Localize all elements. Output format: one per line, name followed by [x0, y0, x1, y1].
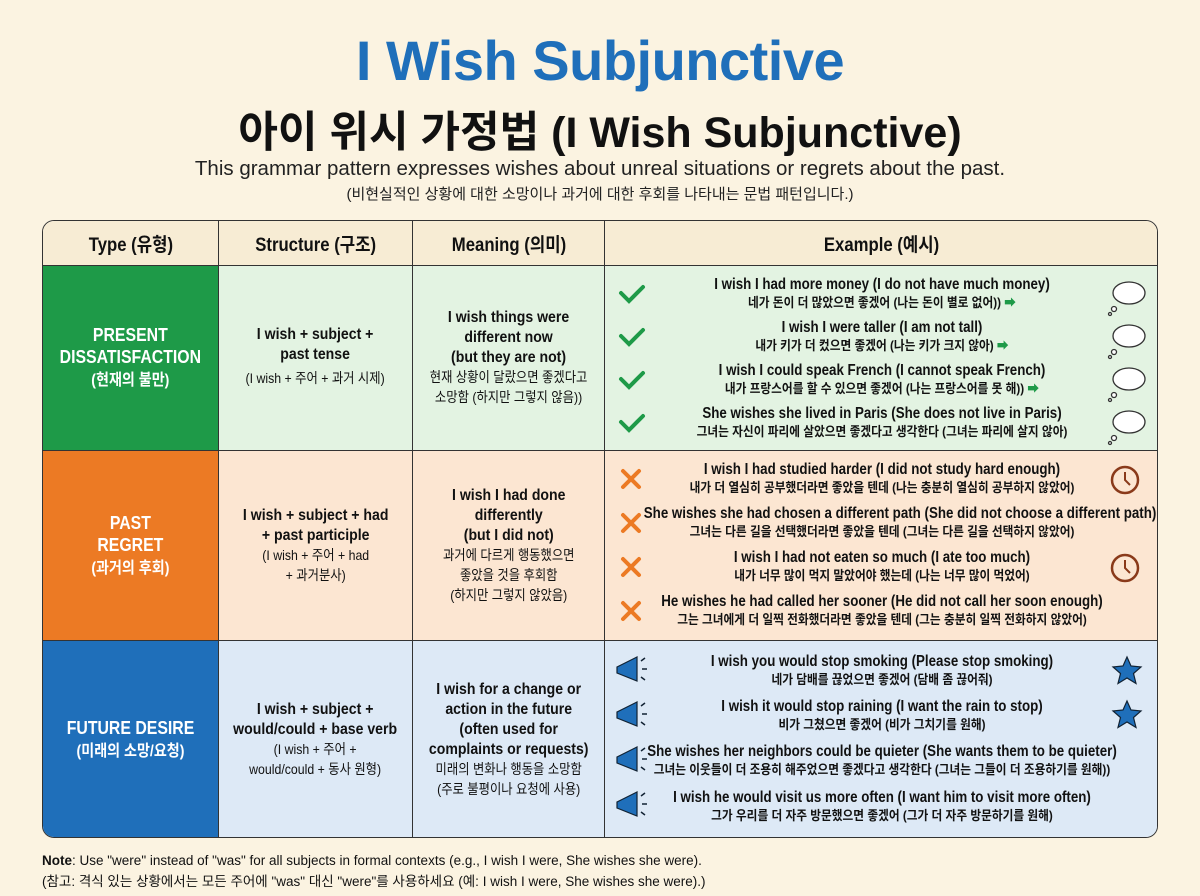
examples present	[605, 266, 1159, 451]
type label past: (과거의 후회)	[91, 560, 170, 576]
examples future: I wish it would stop raining (I want the rain to stop)	[721, 698, 1043, 715]
examples future: 네가 담배를 끊었으면 좋겠어 (담배 좀 끊어줘)	[771, 672, 993, 687]
structure future: I wish + subject +	[257, 701, 374, 718]
meaning present: 소망함 (하지만 그렇지 않음))	[435, 389, 582, 405]
structure future	[219, 641, 413, 839]
table	[42, 220, 1158, 838]
row: past regret	[43, 451, 1157, 641]
structure past: + 과거분사)	[285, 566, 346, 582]
examples past: 그녀는 다른 길을 선택했더라면 좋았을 텐데 (그녀는 다른 길을 선택하지 않았어)	[690, 524, 1074, 539]
examples present: 내가 프랑스어를 할 수 있으면 좋겠어 (나는 프랑스어를 못 해)) ➡	[725, 381, 1039, 396]
meaning present: (but they are not)	[451, 349, 566, 366]
examples past: He wishes he had called her sooner (He did not call her soon enough)	[661, 593, 1103, 610]
header row: Meaning (의미)	[451, 234, 566, 256]
icons: checkmarks	[618, 284, 646, 433]
type label present: DISSATISFACTION	[60, 347, 201, 367]
icons: stars	[1112, 656, 1142, 729]
meaning present: 현재 상황이 달랐으면 좋겠다고	[430, 369, 587, 385]
structure present: I wish + subject +	[257, 326, 374, 343]
type label present	[43, 266, 219, 451]
footer note: (참고: 격식 있는 상황에서는 모든 주어에 "was" 대신 "were"를 사용하세요 (예: I wish I were, She wishes she were).)	[42, 874, 706, 889]
meaning past: I wish I had done	[452, 486, 565, 504]
title: I Wish Subjunctive	[356, 29, 844, 92]
footer note	[42, 853, 706, 889]
type label present: PRESENT	[93, 325, 168, 345]
examples future: 그가 우리를 더 자주 방문했으면 좋겠어 (그가 더 자주 방문하기를 원해)	[711, 808, 1053, 823]
examples present: I wish I could speak French (I cannot speak French)	[719, 362, 1045, 379]
row: present dissatisfaction	[43, 266, 1157, 451]
type label present: (현재의 불만)	[91, 372, 170, 389]
structure past	[219, 451, 413, 641]
examples past: 내가 더 열심히 공부했더라면 좋았을 텐데 (나는 충분히 열심히 공부하지 않았어)	[690, 480, 1074, 495]
footer note: Note: Use "were" instead of "was" for all subjects in formal contexts (e.g., I wish I were, She wishes she were).	[42, 853, 702, 868]
examples past: I wish I had studied harder (I did not study hard enough)	[704, 461, 1060, 478]
structure future: would/could + base verb	[234, 721, 397, 738]
examples past: I wish I had not eaten so much (I ate too much)	[734, 549, 1030, 566]
meaning present: I wish things were	[448, 309, 569, 326]
examples future: I wish he would visit us more often (I want him to visit more often)	[673, 789, 1091, 806]
structure future: (I wish + 주어 +	[274, 741, 357, 757]
type label past: PAST	[110, 512, 151, 532]
structure present: past tense	[281, 346, 350, 363]
examples past: She wishes she had chosen a different path (She did not choose a different path)	[644, 505, 1156, 522]
header row: Example (예시)	[824, 234, 940, 256]
examples past: 그는 그녀에게 더 일찍 전화했더라면 좋았을 텐데 (그는 충분히 일찍 전화하지 않았어)	[677, 612, 1087, 627]
examples future: She wishes her neighbors could be quieter (She wants them to be quieter)	[647, 743, 1117, 760]
type label past: REGRET	[97, 534, 163, 554]
icons: thought clouds	[1108, 281, 1146, 446]
structure past: + past participle	[262, 526, 369, 544]
header row	[43, 221, 1159, 266]
description korean: (비현실적인 상황에 대한 소망이나 과거에 대한 후회를 나타내는 문법 패턴입니다.)	[346, 186, 854, 203]
examples present: 네가 돈이 더 많았으면 좋겠어 (나는 돈이 별로 없어)) ➡	[748, 295, 1016, 310]
meaning past	[413, 451, 605, 641]
meaning past: 좋았을 것을 후회함	[460, 566, 557, 582]
meaning past: 과거에 다르게 행동했으면	[443, 546, 574, 562]
meaning future: complaints or requests)	[429, 741, 588, 758]
meaning present: different now	[464, 329, 553, 346]
meaning future: I wish for a change or	[436, 681, 581, 698]
header row: Structure (구조)	[255, 234, 376, 256]
structure past: (I wish + 주어 + had	[262, 546, 369, 562]
header row: Type (유형)	[88, 234, 173, 256]
meaning future: 미래의 변화나 행동을 소망함	[435, 761, 582, 777]
subtitle korean title: 아이 위시 가정법 (I Wish Subjunctive)	[238, 109, 962, 157]
examples future	[605, 641, 1159, 839]
description: This grammar pattern expresses wishes about unreal situations or regrets about the past.	[195, 157, 1005, 180]
examples future: I wish you would stop smoking (Please stop smoking)	[711, 653, 1053, 670]
structure past: I wish + subject + had	[243, 506, 388, 524]
structure future: would/could + 동사 원형)	[249, 761, 381, 777]
meaning future: (often used for	[459, 721, 558, 738]
meaning past: (하지만 그렇지 않았음)	[450, 586, 567, 602]
examples present: I wish I had more money (I do not have much money)	[714, 276, 1050, 293]
meaning future	[413, 641, 605, 839]
icons: crosses	[620, 468, 642, 622]
examples present: She wishes she lived in Paris (She does not live in Paris)	[702, 405, 1062, 422]
meaning past: differently	[474, 506, 543, 524]
examples future: 비가 그쳤으면 좋겠어 (비가 그치기를 원해)	[778, 717, 986, 732]
type label future	[43, 641, 219, 839]
icons: clocks	[1110, 466, 1140, 582]
meaning present	[413, 266, 605, 451]
meaning future: action in the future	[445, 701, 572, 718]
meaning future: (주로 불평이나 요청에 사용)	[437, 781, 580, 797]
structure present	[219, 266, 413, 451]
examples future: 그녀는 이웃들이 더 조용히 해주었으면 좋겠다고 생각한다 (그녀는 그들이 더 조용하기를 원해))	[654, 762, 1110, 777]
examples present: I wish I were taller (I am not tall)	[782, 319, 982, 336]
type label future: FUTURE DESIRE	[67, 718, 194, 738]
examples past	[605, 451, 1159, 641]
examples present: 내가 키가 더 컸으면 좋겠어 (나는 키가 크지 않아) ➡	[755, 338, 1009, 353]
examples present: 그녀는 자신이 파리에 살았으면 좋겠다고 생각한다 (그녀는 파리에 살지 않아)	[697, 424, 1067, 439]
examples past: 내가 너무 많이 먹지 말았어야 했는데 (나는 너무 많이 먹었어)	[734, 568, 1030, 583]
meaning past: (but I did not)	[464, 526, 553, 544]
type label past	[43, 451, 219, 641]
icons: megaphones	[616, 656, 647, 817]
type label future: (미래의 소망/요청)	[77, 743, 184, 760]
structure present: (I wish + 주어 + 과거 시제)	[246, 370, 385, 386]
row: future desire	[43, 641, 1157, 837]
